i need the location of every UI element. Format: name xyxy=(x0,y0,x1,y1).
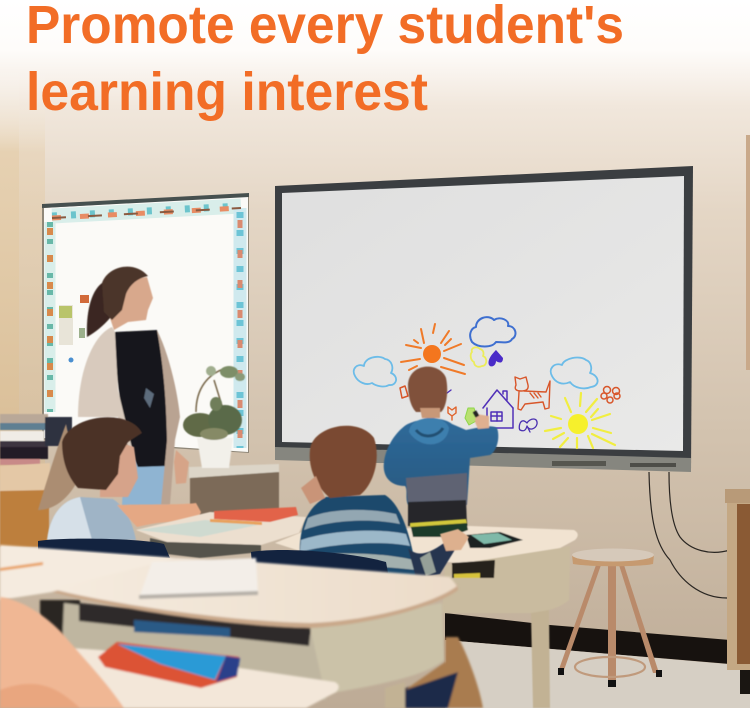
left back desk xyxy=(0,545,177,600)
display screen xyxy=(282,176,684,451)
pencil case xyxy=(98,642,239,688)
green pencil case xyxy=(410,519,468,537)
desk pocket xyxy=(79,603,311,646)
ponytail xyxy=(38,424,78,510)
desk leg xyxy=(385,682,405,708)
hoodie body xyxy=(384,419,498,505)
notebook xyxy=(139,558,258,598)
teacher xyxy=(78,267,189,506)
ponytail xyxy=(87,283,110,337)
purple butterfly xyxy=(519,419,537,432)
head xyxy=(110,277,153,330)
hand xyxy=(440,529,469,551)
orange sun xyxy=(401,324,465,374)
power cables xyxy=(649,472,730,598)
teacher's pinboard xyxy=(42,193,249,453)
boy student in striped sweater xyxy=(300,426,469,578)
front-right desk with tablet xyxy=(275,519,578,708)
orange pencil xyxy=(0,562,43,571)
stool xyxy=(558,548,662,687)
hair xyxy=(62,417,142,490)
orange cat xyxy=(515,377,550,410)
children's drawings on the screen xyxy=(354,317,620,448)
back desk with pencil case xyxy=(136,507,306,558)
yellow flower xyxy=(471,347,486,367)
jeans xyxy=(122,456,168,506)
potted plant xyxy=(183,366,245,468)
head xyxy=(408,367,447,412)
desk top xyxy=(52,558,458,628)
yellow sun xyxy=(545,393,615,448)
left orange flower xyxy=(400,386,408,398)
green mark xyxy=(465,408,478,425)
desk front panel xyxy=(62,603,326,700)
hand xyxy=(475,414,489,429)
black top xyxy=(115,330,167,467)
dark gap at left xyxy=(40,600,80,640)
title line 2: learning interest xyxy=(26,62,428,122)
book rack xyxy=(452,560,495,578)
blue cloud xyxy=(470,317,515,346)
shirt xyxy=(47,497,136,540)
hand xyxy=(174,450,189,484)
books on the shelf xyxy=(0,414,72,465)
purple house xyxy=(483,390,513,428)
student arm xyxy=(0,597,124,708)
colourful border xyxy=(50,206,241,448)
right-hand cabinet xyxy=(725,489,750,694)
blue chair back, centre xyxy=(251,550,388,573)
purple heart xyxy=(489,350,503,366)
blue chair back, left xyxy=(38,539,170,558)
cardigan right xyxy=(157,330,180,505)
face xyxy=(100,440,138,497)
desk right side block xyxy=(310,603,444,694)
foreground desk with red pencil case xyxy=(0,597,339,708)
orange tulip xyxy=(448,407,456,420)
purple stroke xyxy=(447,390,451,393)
cardigan left xyxy=(78,327,135,460)
title: Promote every student's learning interest xyxy=(26,0,624,122)
arm xyxy=(117,503,201,527)
orange flower right xyxy=(601,386,620,403)
sleeve xyxy=(408,543,456,578)
main front desk xyxy=(0,545,483,708)
wooden cabinet and side table xyxy=(0,463,279,547)
sweater stripes xyxy=(304,510,400,530)
head xyxy=(310,426,377,498)
boy drawing at the screen xyxy=(384,367,498,526)
girl student xyxy=(38,417,201,540)
light blue cloud left xyxy=(354,357,396,386)
light blue cloud right xyxy=(551,358,598,388)
floor and skirting xyxy=(445,613,750,708)
interactive display xyxy=(275,166,693,472)
desk leg xyxy=(531,610,550,708)
tablet xyxy=(466,532,523,548)
navy chair seat xyxy=(405,672,458,708)
trousers xyxy=(405,637,483,708)
